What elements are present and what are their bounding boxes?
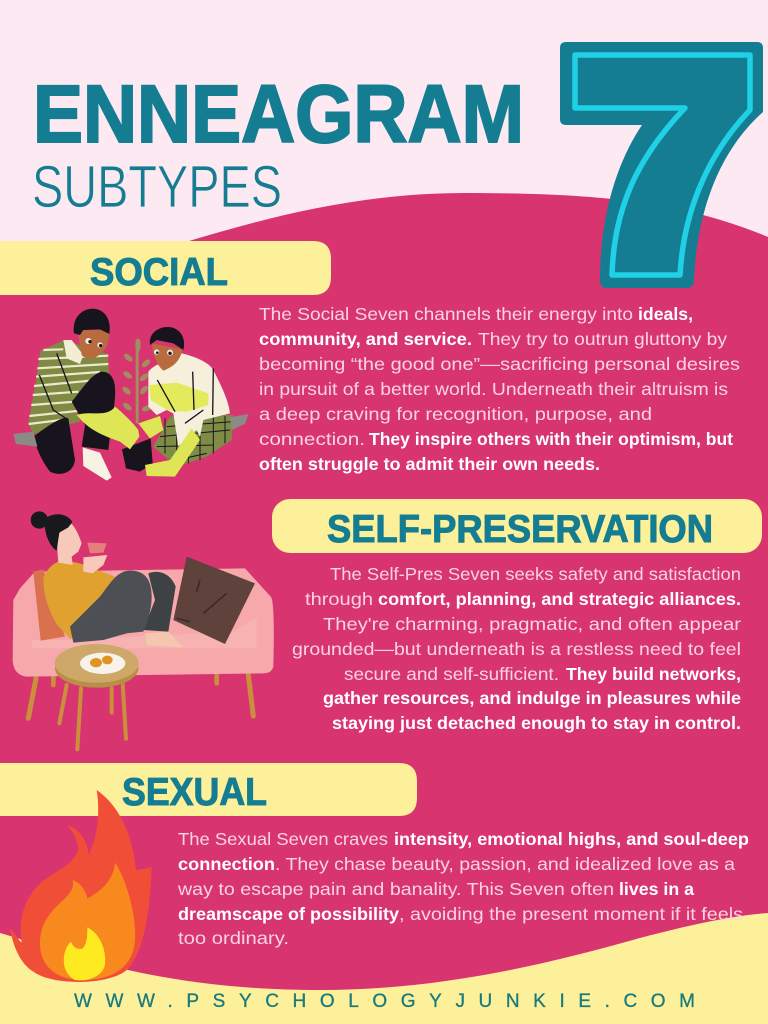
orange pillow <box>33 569 65 641</box>
text: social description <box>259 304 740 474</box>
plant <box>121 338 152 423</box>
text: self-preservation description: comfort, planning, and strategic alliances. <box>378 589 741 609</box>
banner: sexual: SEXUAL <box>122 771 267 814</box>
pot <box>122 438 153 472</box>
sweater <box>43 560 115 639</box>
text: self-preservation description: grounded—but underneath is a restless need to feel <box>292 639 741 659</box>
background: yellow bottom wave <box>0 913 768 1024</box>
sofa legs <box>28 675 253 718</box>
text: sexual description: , avoiding the present moment if it feels <box>399 904 743 924</box>
icon: flame <box>10 790 152 982</box>
text: sexual description: connection <box>178 854 275 874</box>
website url: WWW.PSYCHOLOGYJUNKIE.COM <box>74 991 695 1012</box>
sofa <box>13 568 274 677</box>
text: social description: often struggle to admit their own needs. <box>259 454 600 474</box>
left person shoes <box>13 432 37 447</box>
right person face <box>152 343 183 371</box>
text: social description: The Social Seven channels their energy into <box>259 304 633 324</box>
head and neck <box>57 524 82 565</box>
mug <box>87 543 107 553</box>
table legs <box>59 683 126 749</box>
illustration: woman relaxing on sofa <box>13 511 274 749</box>
text: social description: in pursuit of a better world. Underneath their altruism is <box>259 379 728 399</box>
banner: social: SOCIAL <box>90 251 228 294</box>
banner: sexual <box>0 763 417 816</box>
text: sexual description: The Sexual Seven craves <box>178 829 388 849</box>
hair <box>31 511 72 551</box>
text: social description: They try to outrun gluttony by <box>478 329 727 349</box>
text: social description: connection. <box>259 429 365 449</box>
text: self-preservation description <box>292 564 741 733</box>
text: sexual description: lives in a <box>619 879 694 899</box>
banner: self-preservation: SELF-PRESERVATION <box>327 508 713 551</box>
left person sweater <box>28 340 109 434</box>
text: self-preservation description: staying just detached enough to stay in control. <box>332 713 741 733</box>
text: sexual description: dreamscape of possibility <box>178 904 399 924</box>
right person hands <box>138 416 163 438</box>
feet <box>145 632 183 647</box>
text: self-preservation description: gather resources, and indulge in pleasures while <box>323 688 741 708</box>
text: social description: community, and service. <box>259 329 472 349</box>
title: ENNEAGRAM <box>33 69 524 160</box>
text: self-preservation description: secure and self-sufficient. <box>344 664 559 684</box>
table top <box>55 649 138 688</box>
text: self-preservation description: They're charming, pragmatic, and often appear <box>323 614 741 634</box>
text: sexual description: . They chase beauty, passion, and idealized love as a <box>275 854 735 874</box>
near leg <box>70 571 152 643</box>
hands <box>83 555 107 573</box>
brown pillow <box>173 557 255 644</box>
subtitle: SUBTYPES <box>32 154 282 220</box>
banner: social <box>0 241 331 295</box>
left person face <box>77 330 109 359</box>
far leg <box>143 572 176 632</box>
text: social description: a deep craving for recognition, purpose, and <box>259 404 652 424</box>
right person sweater <box>148 353 230 447</box>
text: sexual description: intensity, emotional highs, and soul-deep <box>394 829 749 849</box>
text: social description: ideals, <box>638 304 693 324</box>
right person trousers <box>153 415 233 467</box>
big number 7 <box>560 42 763 288</box>
text: sexual description <box>177 829 749 948</box>
illustration: two people planting <box>13 309 248 481</box>
plate and pastries <box>80 653 125 674</box>
text: sexual description: way to escape pain and banality. This Seven often <box>177 879 614 899</box>
text: self-preservation description: The Self-Pres Seven seeks safety and satisfaction <box>330 564 741 584</box>
left person sleeve <box>77 407 139 449</box>
text: sexual description: too ordinary. <box>178 928 289 948</box>
banner: self-preservation <box>272 499 762 553</box>
text: social description: They inspire others with their optimism, but <box>369 429 733 449</box>
left person trousers <box>72 372 115 450</box>
text: self-preservation description: through <box>305 589 373 609</box>
text: self-preservation description: They build networks, <box>566 664 741 684</box>
text: social description: becoming “the good one”—sacrificing personal desires <box>259 354 740 374</box>
